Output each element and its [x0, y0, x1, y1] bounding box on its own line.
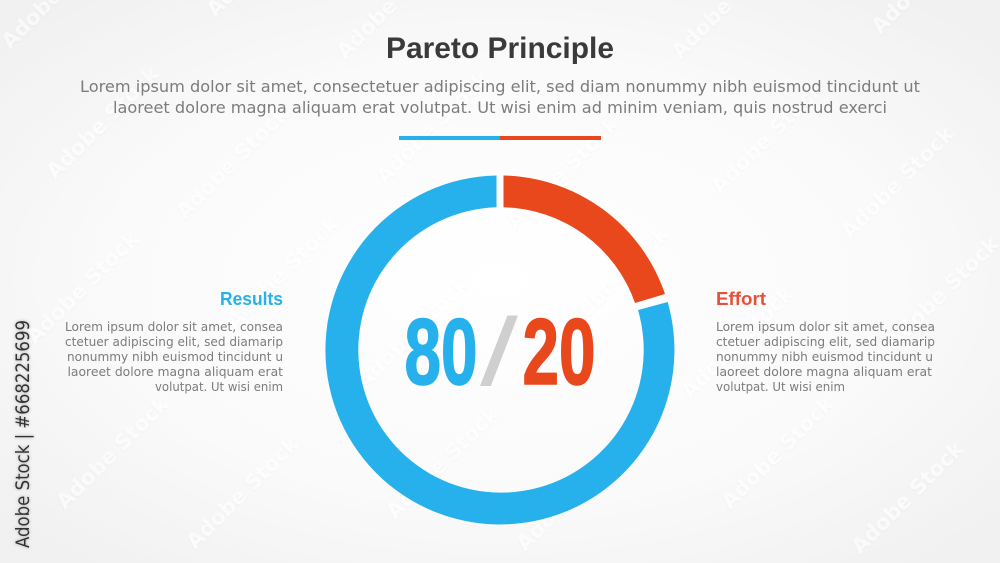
divider bar: blue and red — [399, 136, 601, 140]
watermarks: Adobe Stock — [717, 391, 839, 514]
watermarks: Adobe Stock — [172, 101, 294, 224]
heading: results: Results — [220, 289, 283, 309]
text block: effort: ctetuer adipiscing elit, sed diamarip — [716, 335, 935, 349]
intro paragraph: laoreet dolore magna aliquam erat volutpat. Ut wisi enim ad minim veniam, quis nostrud exerci — [113, 98, 887, 117]
heading: effort: Effort — [716, 289, 766, 309]
text block: results: Lorem ipsum dolor sit amet, consea — [65, 320, 283, 334]
segment: 80 percent results — [325, 176, 674, 524]
donut chart: 80/20 — [325, 176, 674, 524]
watermarks: Adobe Stock — [707, 76, 829, 199]
watermarks: Adobe Stock — [42, 61, 164, 184]
watermarks: Adobe Stock — [837, 121, 959, 244]
center figure: 80/20: 80 — [404, 299, 478, 404]
stock id side label: Adobe Stock | #668225699 — [12, 320, 34, 548]
watermarks: Adobe Stock — [677, 281, 799, 404]
intro paragraph — [80, 77, 920, 117]
text block: effort: Lorem ipsum dolor sit amet, consea — [716, 320, 935, 334]
text block: effort: laoreet dolore magna aliquam erat — [716, 365, 932, 379]
title: Pareto Principle — [386, 32, 614, 65]
center figure: 80/20 — [404, 299, 596, 406]
intro paragraph: Lorem ipsum dolor sit amet, consectetuer adipiscing elit, sed diam nonummy nibh euismod tincidunt ut — [80, 77, 920, 96]
watermarks: Adobe Stock — [847, 436, 969, 559]
watermarks: Adobe Stock — [382, 401, 504, 524]
segment: 20 percent effort — [504, 176, 665, 303]
text block: results: nonummy nibh euismod tincidunt u — [67, 350, 283, 364]
right panel: effort — [716, 289, 935, 394]
text block: results: volutpat. Ut wisi enim — [155, 380, 283, 394]
text block: results: ctetuer adipiscing elit, sed diamarip — [65, 335, 283, 349]
watermarks: Adobe Stock — [552, 221, 674, 344]
center figure: 80/20: 20 — [522, 299, 596, 404]
watermarks: Adobe Stock — [182, 431, 304, 554]
text block: effort — [716, 320, 935, 394]
text block: results — [65, 320, 283, 394]
text block: results: laoreet dolore magna aliquam erat — [68, 365, 283, 379]
left panel: results — [65, 289, 283, 394]
watermarks: Adobe Stock — [52, 391, 174, 514]
watermarks: Adobe Stock — [22, 226, 144, 349]
watermarks: Adobe Stock — [502, 111, 624, 234]
text block: effort: volutpat. Ut wisi enim — [716, 380, 845, 394]
watermarks: Adobe Stock — [512, 433, 634, 556]
watermarks: Adobe Stock — [372, 66, 494, 189]
watermarks: Adobe Stock — [222, 211, 344, 334]
center figure: 80/20: / — [480, 299, 518, 406]
watermarks: Adobe Stock — [882, 231, 1000, 354]
watermarks: Adobe Stock — [352, 271, 474, 394]
text block: effort: nonummy nibh euismod tincidunt u — [716, 350, 933, 364]
